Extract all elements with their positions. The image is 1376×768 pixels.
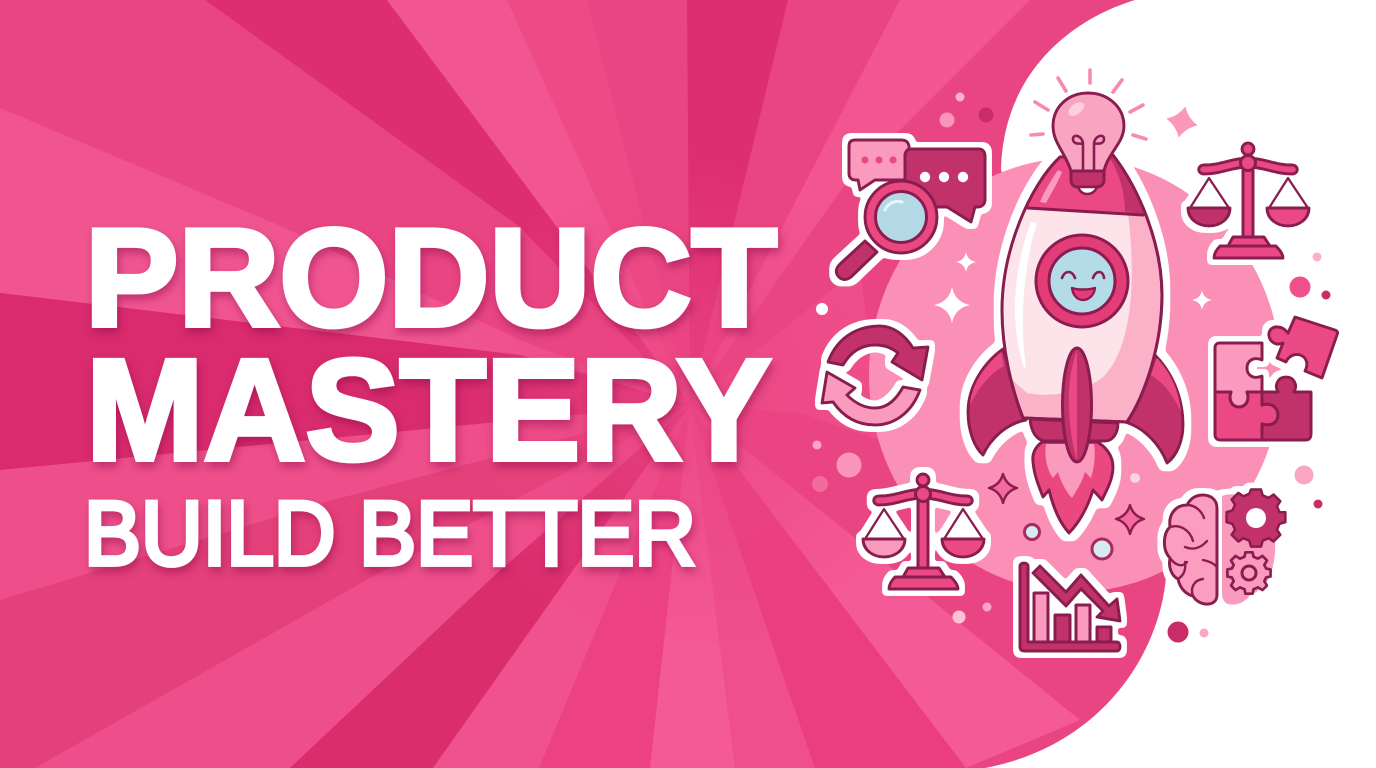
beam: [1199, 158, 1297, 174]
small gear: [1227, 552, 1271, 594]
center fin: [1062, 348, 1092, 462]
right lobe backdrop: [1222, 494, 1275, 605]
window with smiling face: [1036, 235, 1128, 327]
decorative confetti dots: [812, 92, 1330, 642]
small blue bubbles: [1024, 524, 1112, 559]
magnifier handle: [836, 241, 877, 280]
top-left piece: [1215, 343, 1262, 407]
base: [1228, 237, 1270, 246]
magnifier lens: [865, 181, 937, 253]
large gear: [1227, 489, 1285, 547]
icon: balance scale, lower left: [863, 474, 984, 589]
light speech bubble: [849, 140, 909, 190]
title: Product Mastery, Build Better: [84, 200, 777, 585]
large pink disc behind rocket: [869, 158, 1281, 592]
icon: speech bubbles with magnifier: [836, 140, 985, 280]
title: Product Mastery, Build Better: PRODUCT: [85, 200, 777, 356]
right fin: [1125, 355, 1183, 463]
bottom-left piece: [1215, 392, 1278, 440]
dark speech bubble: [905, 149, 985, 222]
icon: cycle arrows: [822, 326, 928, 425]
falling arrow: [1033, 566, 1120, 621]
bottom-right piece: [1262, 377, 1311, 440]
title: Product Mastery, Build Better: BUILD BETTER: [84, 484, 696, 585]
bottom arrow: [822, 372, 920, 425]
left fin: [968, 349, 1026, 455]
flame: [1033, 442, 1113, 533]
floating piece: [1269, 317, 1338, 378]
nozzle band: [1030, 419, 1118, 441]
bars: [1034, 593, 1048, 643]
icon: light bulb rays: [1031, 70, 1146, 139]
pillar: [1243, 160, 1253, 240]
title: Product Mastery, Build Better: MASTERY: [86, 330, 771, 490]
icon: declining bar chart: [1020, 563, 1120, 651]
icon: rocket with light bulb: [968, 93, 1183, 533]
rocket body: [1002, 155, 1162, 422]
triangular pan hangers: [1190, 178, 1229, 208]
top arrow: [828, 326, 928, 380]
left brain hemisphere: [1164, 495, 1217, 604]
light bulb: [1053, 93, 1124, 171]
axes: [1020, 563, 1120, 651]
body pale shading and nose: [1004, 156, 1144, 395]
icon: puzzle pieces: [1215, 317, 1338, 440]
icon: balance scale, upper right: [1188, 143, 1309, 258]
pans: [1188, 208, 1230, 226]
icon: brain and gears: [1164, 489, 1285, 605]
decorative sparkle stars: [934, 103, 1212, 534]
